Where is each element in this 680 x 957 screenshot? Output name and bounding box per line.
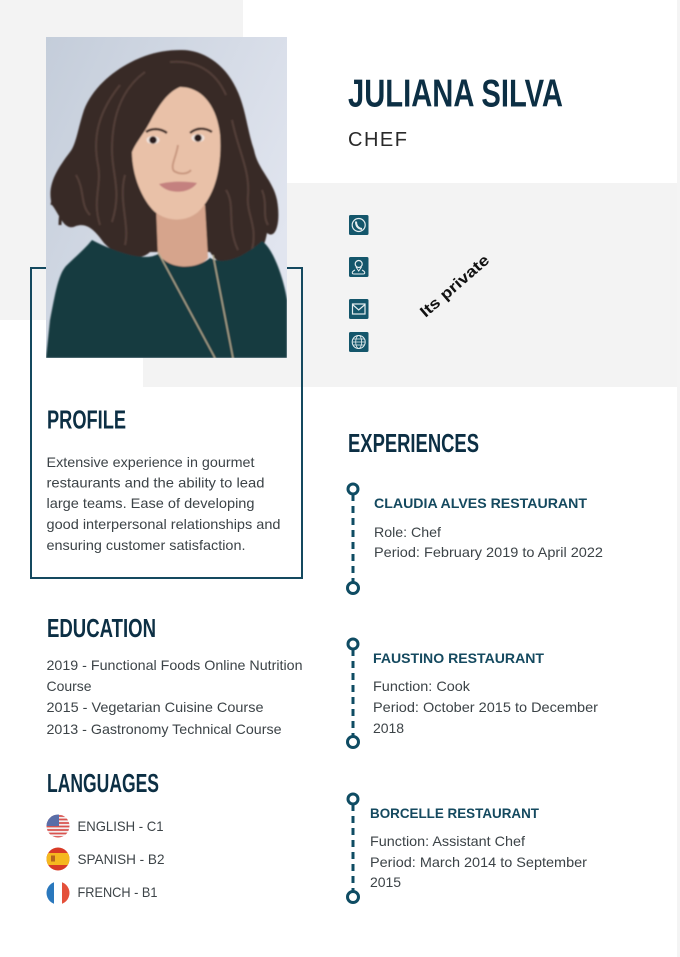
experience 2: FAUSTINO RESTAURANT xyxy=(373,650,544,666)
flag: USA xyxy=(46,814,70,838)
icon: globe xyxy=(349,332,368,352)
experience 3 xyxy=(370,805,587,890)
job subtitle: CHEF xyxy=(348,129,407,151)
education list xyxy=(46,657,302,737)
profile text: Extensive experience in gourmet xyxy=(46,454,255,470)
education list: 2019 - Functional Foods Online Nutrition xyxy=(46,657,302,673)
profile text: large teams. Ease of developing xyxy=(46,495,254,511)
experience 3: Period: March 2014 to September xyxy=(370,854,587,870)
language: Spanish: SPANISH - B2 xyxy=(78,851,165,867)
education list: 2013 - Gastronomy Technical Course xyxy=(46,721,282,737)
experience 2: Function: Cook xyxy=(373,678,471,694)
timeline 3 xyxy=(348,794,358,902)
language: French: FRENCH - B1 xyxy=(78,884,158,900)
icon: phone xyxy=(349,215,368,235)
heading: experiences: EXPERIENCES xyxy=(348,428,479,458)
heading: profile: PROFILE xyxy=(47,404,126,434)
experience 1: Period: February 2019 to April 2022 xyxy=(374,544,603,560)
flag: Spain xyxy=(46,847,70,871)
experience 1 xyxy=(374,495,603,560)
language: English: ENGLISH - C1 xyxy=(78,818,164,834)
profile text: good interpersonal relationships and xyxy=(46,516,280,532)
experience 3: BORCELLE RESTAURANT xyxy=(370,805,539,821)
photo of Juliana Silva xyxy=(46,37,287,358)
icon: location xyxy=(349,257,368,277)
experience 1: CLAUDIA ALVES RESTAURANT xyxy=(374,495,587,511)
experience 1: Role: Chef xyxy=(374,524,441,540)
profile text: ensuring customer satisfaction. xyxy=(46,537,246,553)
profile text xyxy=(46,454,280,553)
experience 3: 2015 xyxy=(370,874,401,890)
heading: languages: LANGUAGES xyxy=(47,768,159,798)
profile text: restaurants and the ability to lead xyxy=(46,474,264,490)
experience 2 xyxy=(373,650,598,736)
experience 2: Period: October 2015 to December xyxy=(373,699,598,715)
icon: email xyxy=(349,299,368,319)
experience 3: Function: Assistant Chef xyxy=(370,833,525,849)
flag: France xyxy=(46,882,70,904)
heading: education: EDUCATION xyxy=(47,613,156,643)
rotated note: Its private xyxy=(417,251,493,321)
experience 2: 2018 xyxy=(373,720,404,736)
name title: JULIANA SILVA xyxy=(348,72,563,116)
education list: 2015 - Vegetarian Cuisine Course xyxy=(46,699,264,715)
profile panel frame xyxy=(31,268,302,578)
timeline 1 xyxy=(348,484,358,594)
timeline 2 xyxy=(348,639,358,748)
education list: Course xyxy=(46,678,92,694)
